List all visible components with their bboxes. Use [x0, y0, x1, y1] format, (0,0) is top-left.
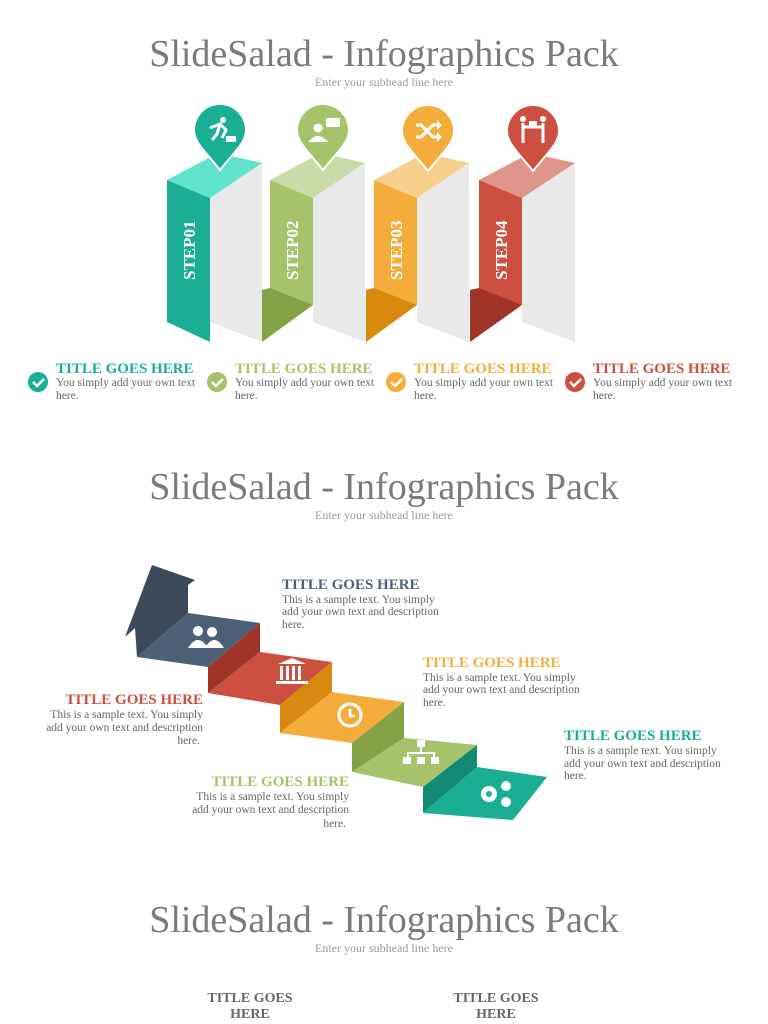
step 3 column	[366, 153, 469, 342]
text block: orange: This is a sample text. You simply	[423, 672, 576, 684]
step 4 column: STEP04	[492, 220, 511, 280]
checklist item 2: TITLE GOES HERE	[235, 361, 373, 377]
checklist item 3	[386, 361, 554, 402]
teal riser	[423, 745, 477, 813]
checklist item 2: You simply add your own text	[235, 377, 375, 389]
checklist item 2: here.	[235, 390, 258, 402]
text block: teal: TITLE GOES HERE	[564, 728, 702, 744]
title 2: SlideSalad - Infographics Pack	[149, 466, 619, 508]
text block: slate: TITLE GOES HERE	[282, 577, 420, 593]
checklist item 1: You simply add your own text	[56, 377, 196, 389]
orange step	[280, 692, 404, 743]
icon pin 1: runner	[194, 104, 246, 170]
step 2 column: STEP02	[283, 220, 302, 280]
checklist item 3: here.	[414, 390, 437, 402]
text block: green: This is a sample text. You simply	[196, 791, 349, 803]
checklist item 1: here.	[56, 390, 79, 402]
text block: red: This is a sample text. You simply	[50, 709, 203, 721]
checklist item 4: TITLE GOES HERE	[593, 361, 731, 377]
text block: right: HERE	[476, 1007, 516, 1022]
text block: green: add your own text and description	[192, 804, 349, 816]
text block: green: TITLE GOES HERE	[211, 774, 349, 790]
staircase	[125, 565, 547, 820]
icon: bank	[276, 658, 308, 684]
text block: green: here.	[323, 818, 346, 830]
checklist item 3: TITLE GOES HERE	[414, 361, 552, 377]
text block: red: add your own text and description	[46, 722, 203, 734]
checklist item 4	[565, 361, 733, 402]
step 2 column	[262, 153, 365, 342]
text block: red: here.	[177, 735, 200, 747]
text block: red	[46, 692, 203, 747]
text block: green	[192, 774, 349, 830]
step 1 column: STEP01	[180, 220, 199, 280]
subhead 1: Enter your subhead line here	[315, 75, 453, 89]
text block: orange: TITLE GOES HERE	[423, 655, 561, 671]
text block: teal	[564, 728, 721, 782]
slate step	[137, 613, 260, 667]
title 1: SlideSalad - Infographics Pack	[149, 33, 619, 75]
text block: left: HERE	[230, 1007, 270, 1022]
green step	[352, 738, 477, 787]
checklist item 1	[28, 361, 196, 402]
icon pin 2: speaker	[297, 104, 349, 170]
text block: orange	[423, 655, 580, 709]
icon: org chart	[403, 740, 439, 764]
icon pin 4: people	[507, 105, 559, 171]
orange riser	[280, 662, 332, 733]
text block: left	[193, 991, 307, 1024]
step 4 column	[470, 153, 575, 342]
text block: orange: here.	[423, 697, 446, 709]
text block: right	[439, 991, 553, 1024]
icon pin 3: shuffle	[402, 105, 454, 171]
green riser	[352, 702, 404, 772]
arrow	[125, 565, 195, 657]
text block: left: TITLE GOES	[207, 991, 293, 1006]
text block: slate: here.	[282, 619, 305, 631]
icon: clock	[339, 704, 361, 726]
subhead 2: Enter your subhead line here	[315, 508, 453, 522]
subhead 3: Enter your subhead line here	[315, 941, 453, 955]
text block: teal: add your own text and description	[564, 758, 721, 770]
icon: gears	[481, 781, 511, 807]
text block: right: TITLE GOES	[453, 991, 539, 1006]
step 3 column: STEP03	[387, 220, 406, 280]
checklist item 2	[207, 361, 375, 402]
checklist item 3: You simply add your own text	[414, 377, 554, 389]
red riser	[208, 623, 260, 693]
checklist item 4: here.	[593, 390, 616, 402]
text block: red: TITLE GOES HERE	[65, 692, 203, 708]
checklist item 1: TITLE GOES HERE	[56, 361, 194, 377]
text block: slate: This is a sample text. You simply	[282, 594, 435, 606]
teal step	[423, 767, 547, 820]
checklist item 4: You simply add your own text	[593, 377, 733, 389]
text block: slate: add your own text and description	[282, 606, 439, 618]
text block: teal: here.	[564, 770, 587, 782]
icon: people	[188, 626, 224, 648]
title 3: SlideSalad - Infographics Pack	[149, 899, 619, 941]
red step	[208, 652, 332, 705]
text block: orange: add your own text and description	[423, 684, 580, 696]
text block: slate	[282, 577, 439, 631]
text block: teal: This is a sample text. You simply	[564, 745, 717, 757]
step 1 column	[167, 153, 262, 342]
